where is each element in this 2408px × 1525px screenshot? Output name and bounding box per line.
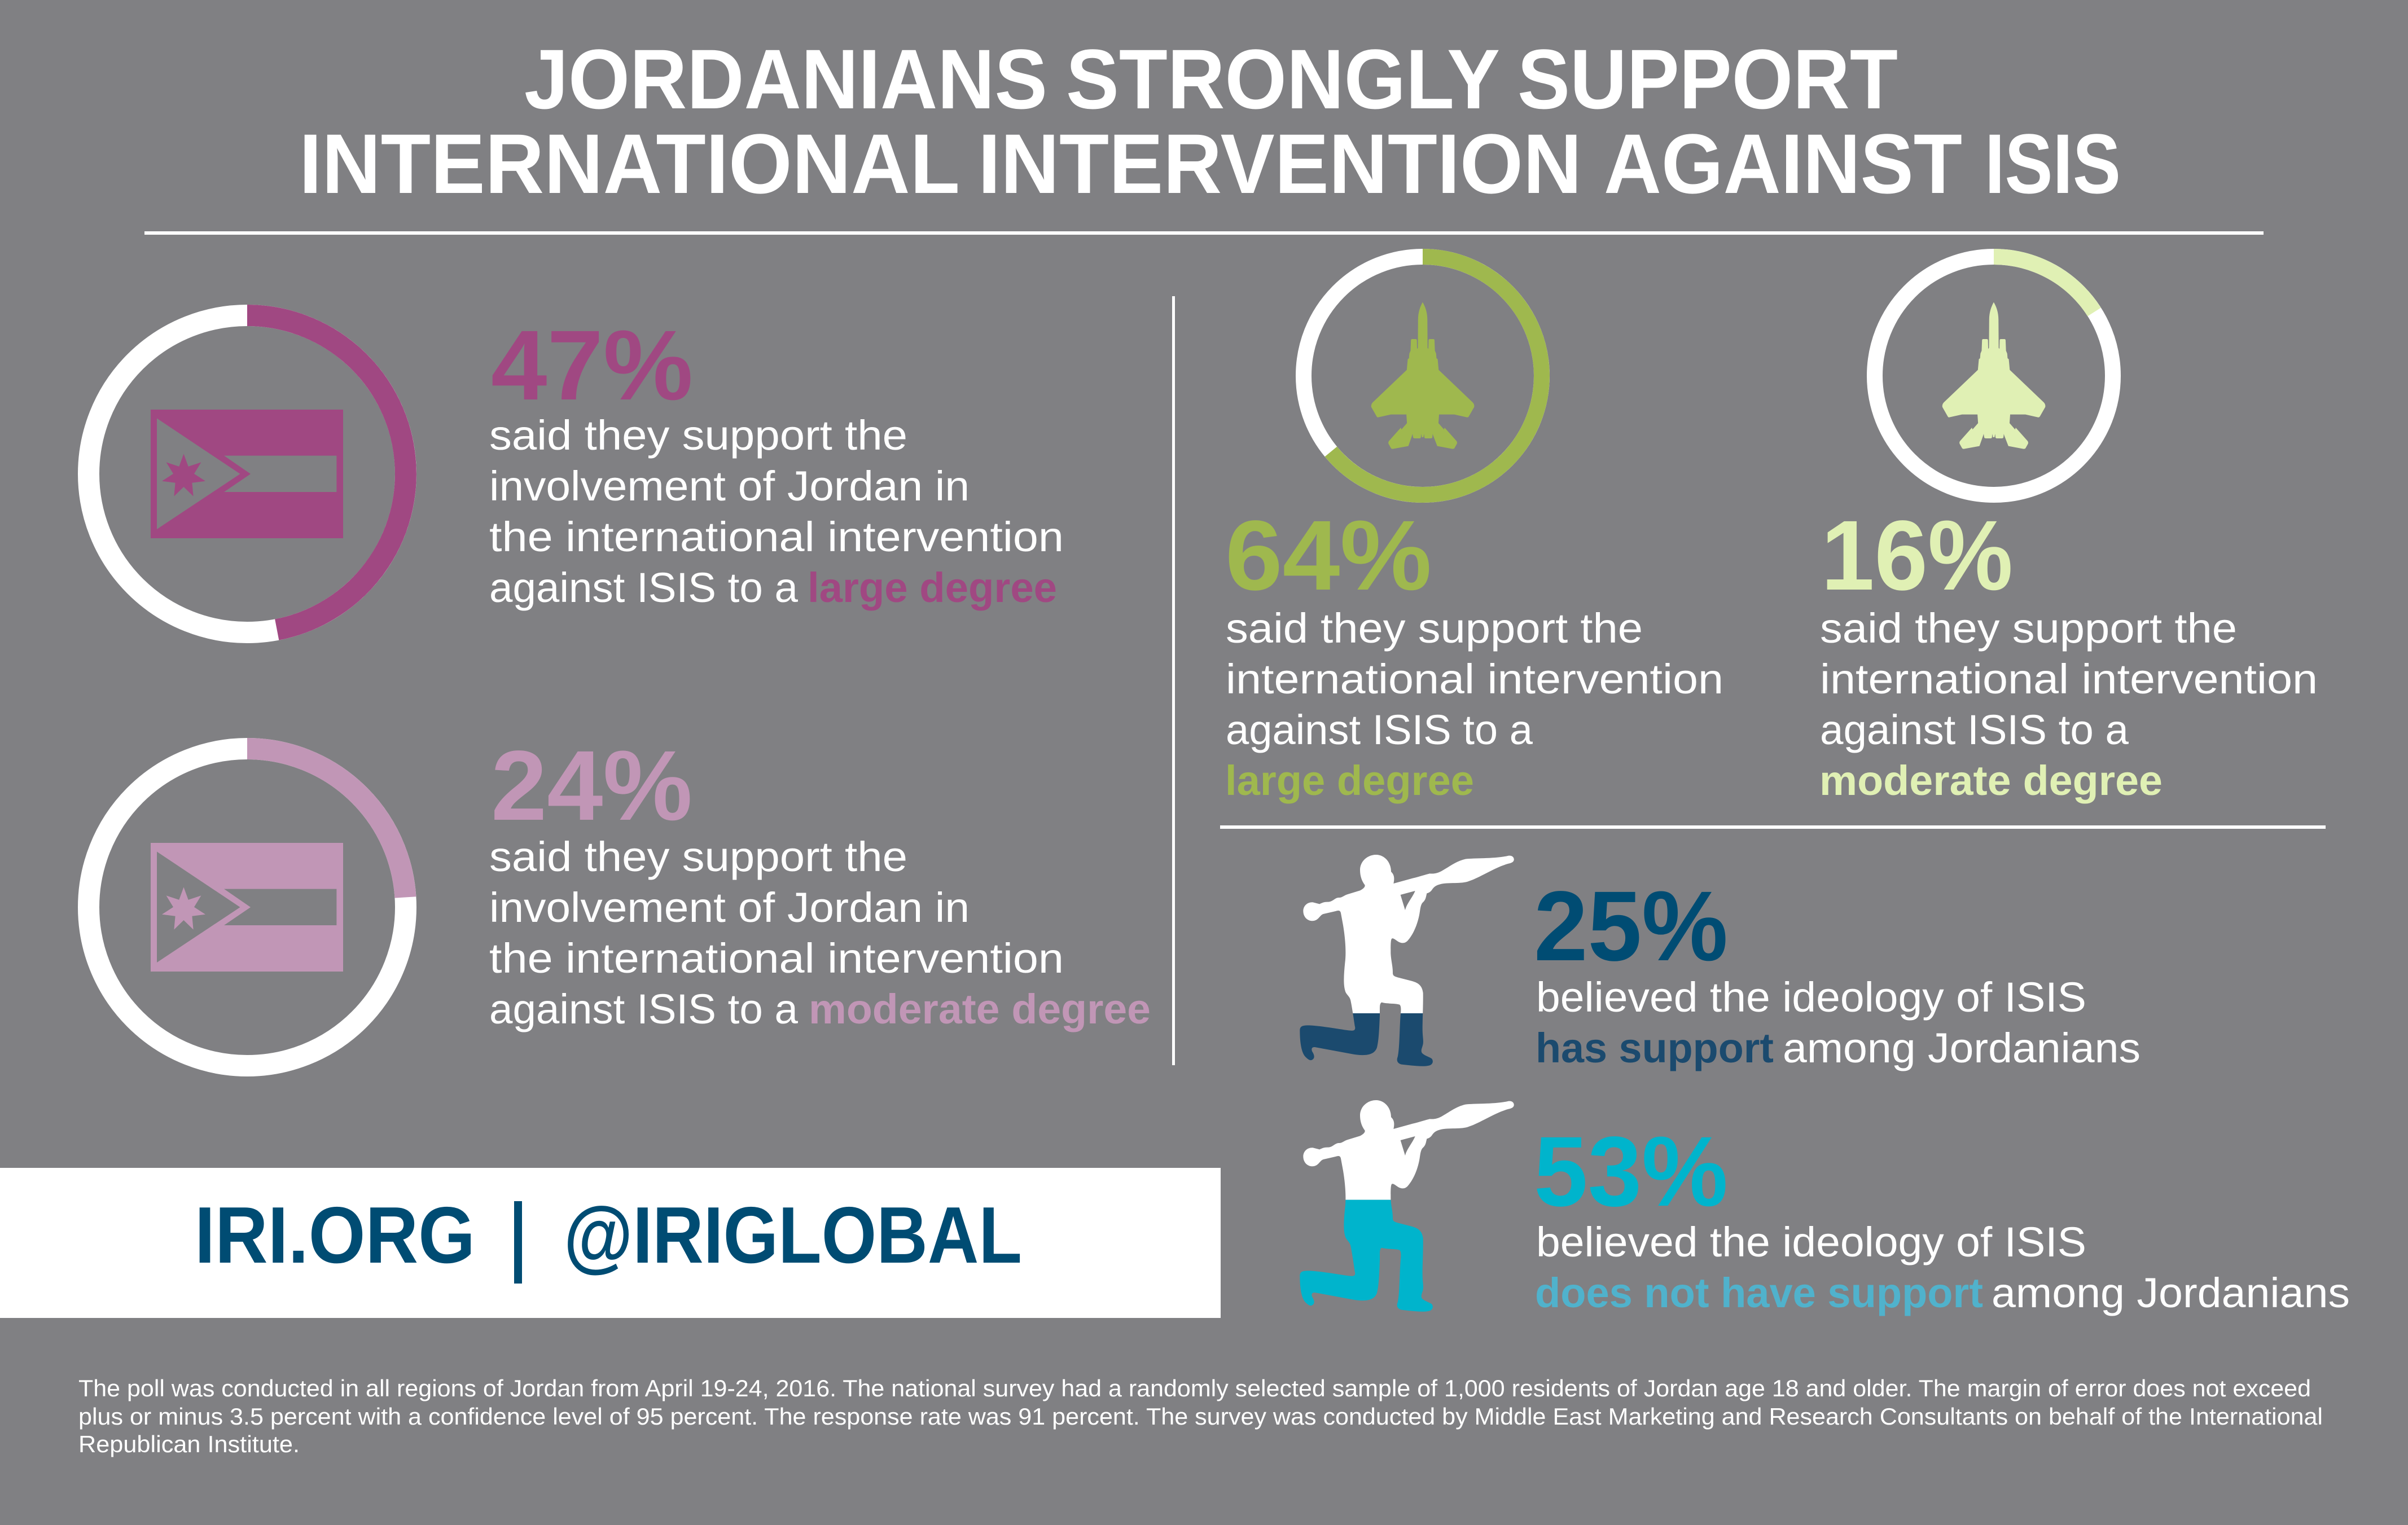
description: 24%: involvement of Jordan in [489, 884, 970, 931]
description: 16%: international intervention [1820, 656, 2318, 702]
stat: 16%: 16% [1821, 500, 2013, 611]
description: 24%: moderate degree [809, 986, 1151, 1032]
description: 47%: said they support the [489, 412, 907, 459]
footnote: methodology: Republican Institute. [78, 1431, 300, 1457]
panel: 53% ideology does not have support [1300, 1100, 2350, 1316]
description: 25%: has support [1536, 1025, 1774, 1071]
donut chart: 64% [1304, 257, 1542, 495]
footnote: methodology [78, 1375, 2323, 1457]
description: 64%: against ISIS to a [1226, 706, 1533, 753]
stat: 24%: 24% [491, 731, 692, 841]
callout: website and handle band: @IRIGLOBAL [564, 1190, 1022, 1280]
description: 25%: believed the ideology of ISIS [1536, 974, 2086, 1021]
description: 64%: large degree [1225, 757, 1474, 804]
description: 64% [1225, 605, 1723, 804]
title: ISIS [1985, 116, 2121, 211]
description: 25% [1536, 974, 2141, 1071]
icon: Jordan flag dark purple [151, 410, 343, 538]
stat: 53%: 53% [1534, 1117, 1728, 1227]
icon: Jordan flag light purple [151, 843, 343, 972]
panel: 47% support Jordan involvement large degree [89, 310, 1064, 632]
title [299, 32, 2121, 211]
footnote: methodology: The poll was conducted in all regions of Jordan from April 19-24, 2016. The national survey had a randomly selected sample of 1,000 residents of Jordan age 18 and older. The margin of error does not exceed [78, 1375, 2311, 1401]
description: 16%: moderate degree [1819, 757, 2163, 804]
icon: kneeling soldier 53% filled [1300, 1100, 1514, 1312]
title: AGAINST [1604, 116, 1962, 211]
panel: 25% ideology has support [1300, 855, 2141, 1071]
title: INTERVENTION [978, 116, 1582, 211]
panel: 24% support Jordan involvement moderate degree [89, 731, 1151, 1066]
description: 47%: large degree [808, 564, 1057, 611]
stat: 47%: 47% [491, 310, 693, 421]
description: 64%: said they support the [1226, 605, 1643, 652]
icon: fighter jet green [1371, 302, 1474, 449]
callout: website and handle band: IRI.ORG [195, 1190, 475, 1280]
donut chart: 24% [89, 749, 406, 1066]
callout: website and handle band [0, 1168, 1221, 1318]
icon: kneeling soldier 25% filled [1300, 855, 1514, 1066]
panel: 64% international intervention large degree [1225, 257, 1723, 804]
title: STRONGLY [1066, 32, 1500, 126]
description: 53% [1535, 1219, 2350, 1316]
description: 64%: international intervention [1226, 656, 1723, 702]
icon: fighter jet pale green [1942, 302, 2045, 449]
description: 16%: said they support the [1820, 605, 2237, 652]
stat: 25%: 25% [1534, 871, 1728, 982]
description: 53%: believed the ideology of ISIS [1536, 1219, 2086, 1265]
description: 24%: against ISIS to a [489, 986, 799, 1032]
description: 24%: the international intervention [489, 935, 1064, 982]
donut chart: 16% [1875, 257, 2113, 495]
description: 24%: said they support the [489, 833, 907, 880]
donut chart: 47% [89, 315, 406, 632]
description: 24% [489, 833, 1151, 1032]
description: 53%: does not have support [1535, 1269, 1983, 1316]
title: SUPPORT [1517, 32, 1898, 126]
description: 47%: involvement of Jordan in [489, 463, 970, 509]
description: 47% [489, 412, 1064, 611]
panel: 16% international intervention moderate degree [1819, 257, 2318, 804]
footnote: methodology: plus or minus 3.5 percent with a confidence level of 95 percent. The response rate was 91 percent. The survey was conducted by Middle East Marketing and Research Consultants on behalf of the International [78, 1403, 2323, 1430]
description: 25%: among Jordanians [1783, 1025, 2141, 1071]
description: 16%: against ISIS to a [1820, 706, 2129, 753]
title: INTERNATIONAL [299, 116, 960, 211]
description: 16% [1819, 605, 2318, 804]
title: JORDANIANS [524, 32, 1047, 126]
description: 53%: among Jordanians [1992, 1269, 2350, 1316]
stat: 64%: 64% [1225, 500, 1432, 611]
description: 47%: against ISIS to a [489, 564, 799, 611]
description: 47%: the international intervention [489, 513, 1064, 560]
